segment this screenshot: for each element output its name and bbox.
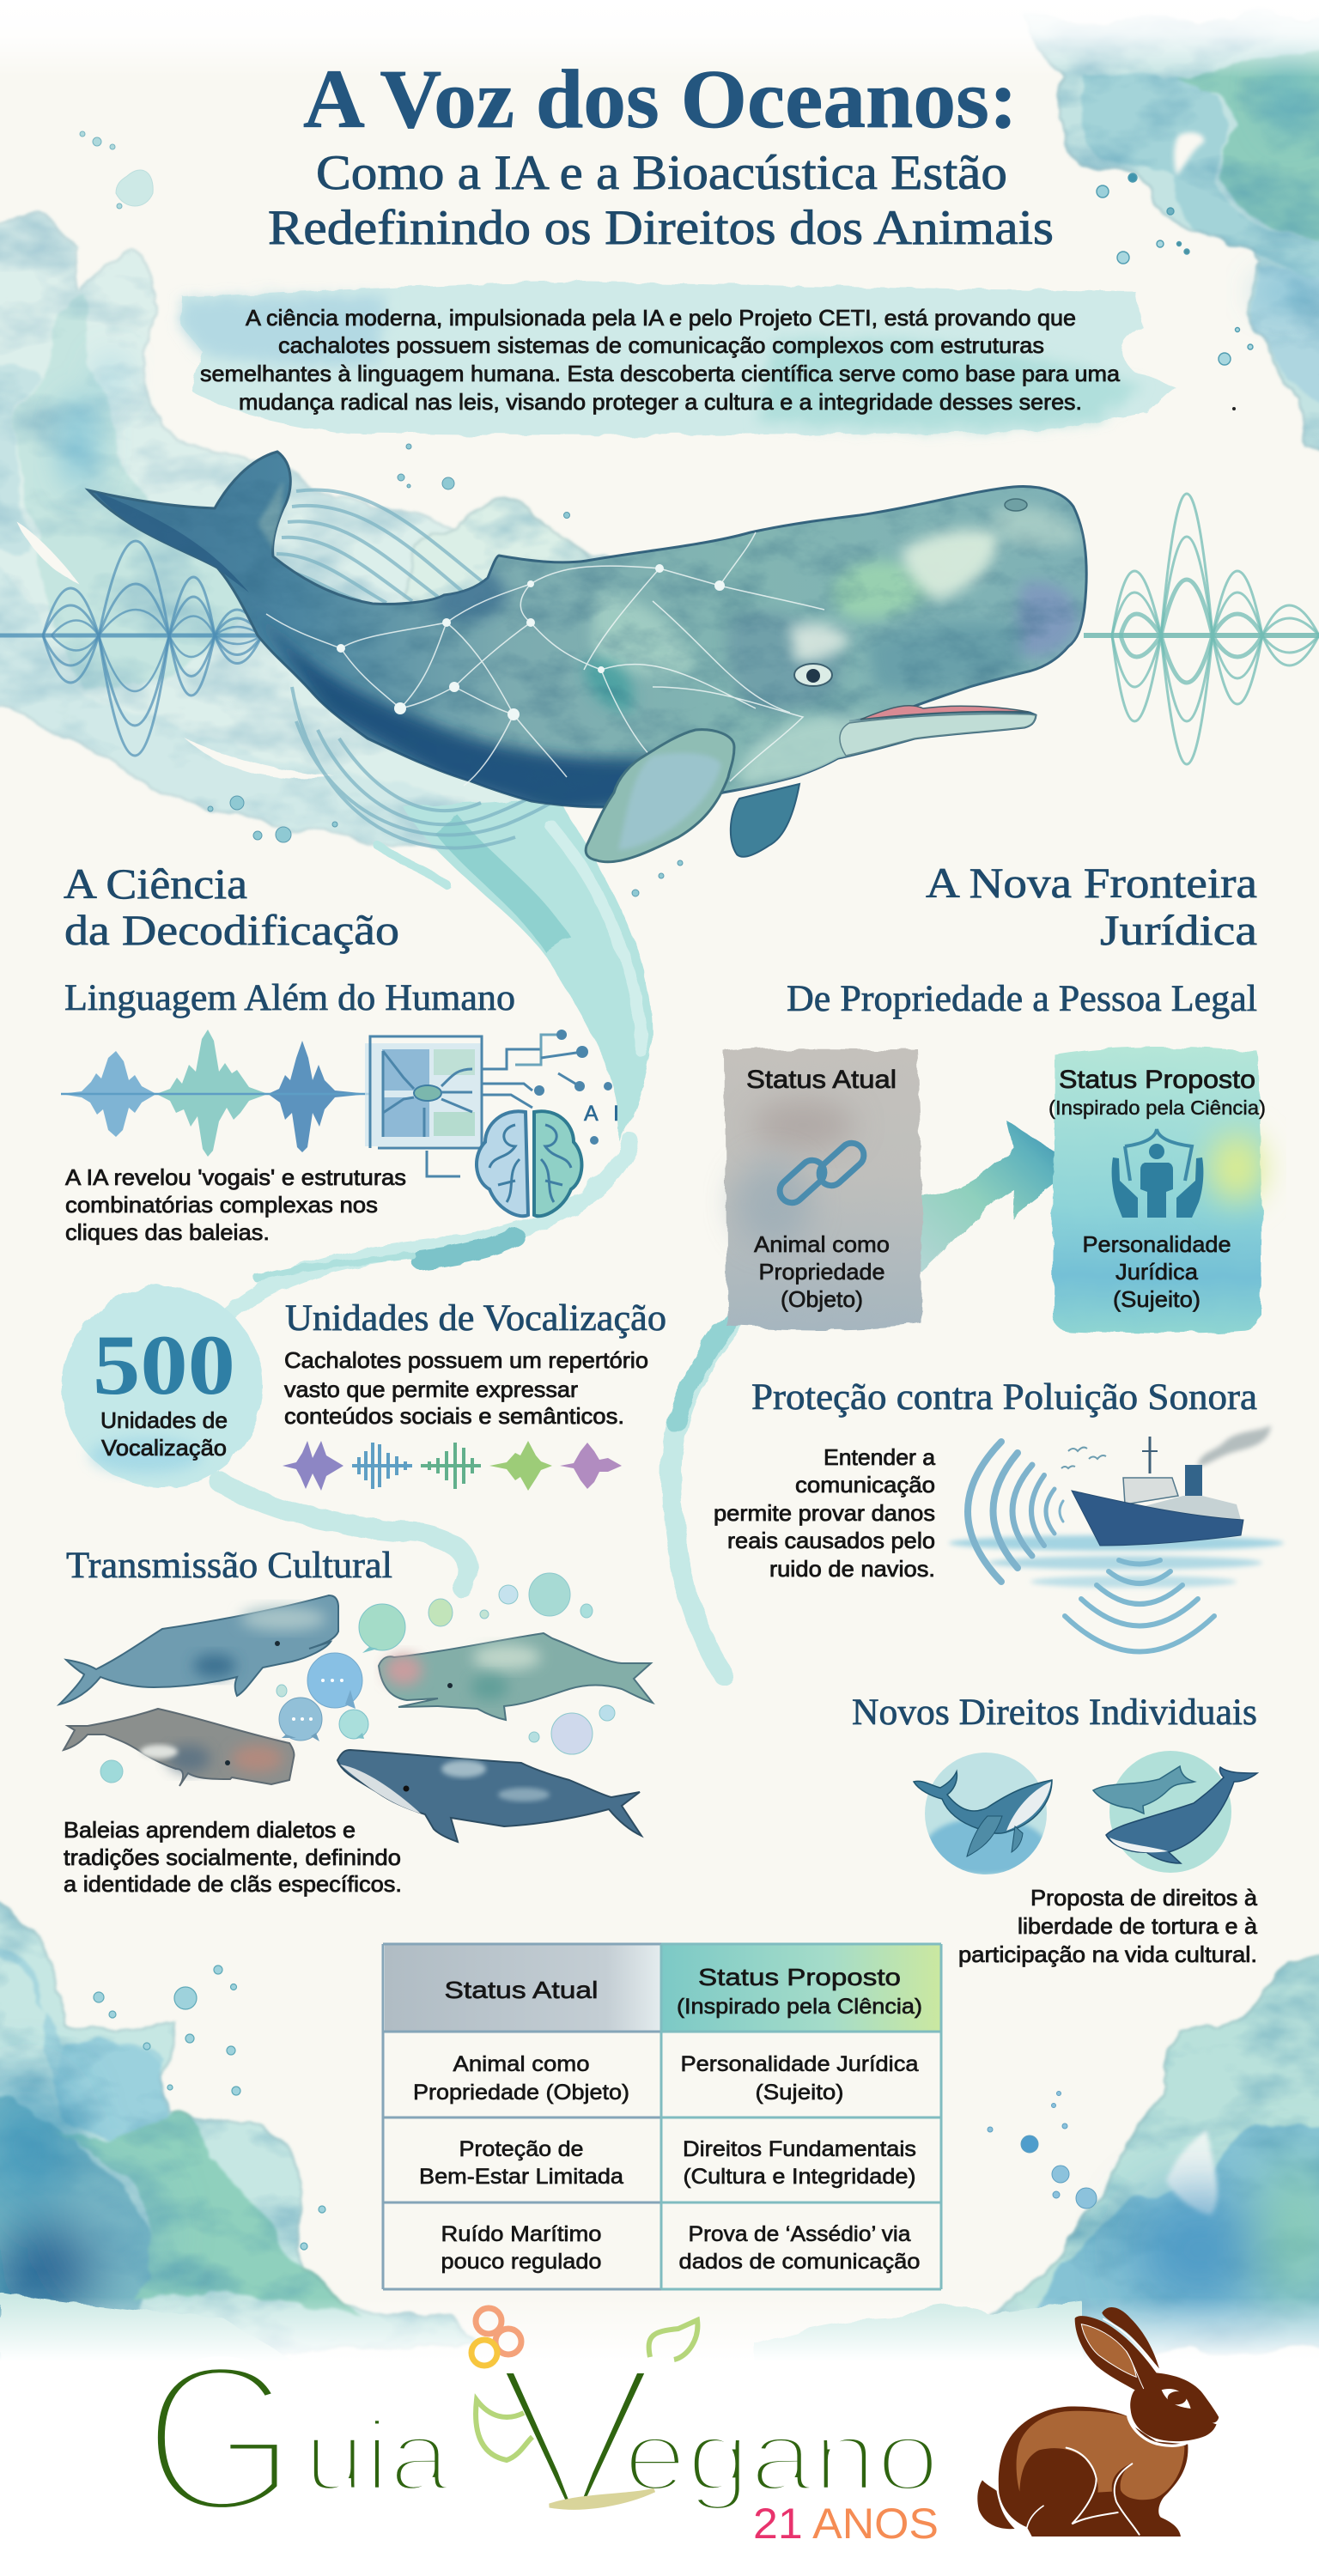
panel: status proposto: Personalidade xyxy=(1082,1231,1231,1257)
small dot xyxy=(1232,407,1236,410)
icon: rabbit xyxy=(977,2307,1219,2537)
blue pigment top right xyxy=(1254,52,1319,309)
comparison table: dados de comunicação xyxy=(678,2250,921,2274)
whale body xyxy=(88,452,1086,807)
section heading: legal: Jurídica xyxy=(1100,906,1257,954)
text: individual rights: participação na vida cultural. xyxy=(958,1941,1257,1967)
eye xyxy=(794,664,832,686)
whale colour washes xyxy=(94,481,1078,816)
stat circle 500 xyxy=(62,1286,263,1487)
splatter droplets bottom right xyxy=(988,2092,1097,2208)
neural network lines xyxy=(266,532,824,786)
subtitle line 2: Redefinindo os Direitos dos Animais xyxy=(268,201,1054,255)
text: cultural transmission: tradições socialmente, definindo xyxy=(64,1844,401,1870)
logo: Guia Vegano xyxy=(142,2308,939,2560)
header left xyxy=(385,1944,661,2032)
comparison table: Animal como xyxy=(453,2052,589,2076)
paper-coloured gaps in the left wash xyxy=(19,524,335,779)
mini waveforms xyxy=(283,1441,622,1491)
intro text: semelhantes à linguagem humana. Esta descoberta científica serve como base para uma xyxy=(200,361,1121,386)
heading: vocal units: Unidades de Vocalização xyxy=(285,1298,666,1339)
text: individual rights: Proposta de direitos à xyxy=(1030,1885,1258,1911)
pigment bottom right xyxy=(1134,2155,1319,2310)
panel: status atual: (Objeto) xyxy=(781,1286,863,1312)
whale 2 xyxy=(379,1633,653,1720)
icon: brain xyxy=(477,1111,581,1216)
label: A I xyxy=(584,1102,619,1126)
whale highlights xyxy=(739,507,1082,786)
watercolor wash: top right xyxy=(1019,17,1319,464)
text: individual rights: liberdade de tortura e à xyxy=(1018,1913,1258,1939)
body patch xyxy=(1017,2411,1184,2500)
main title: A Voz dos Oceanos: xyxy=(303,53,1018,146)
blue accents in the left wash xyxy=(60,354,127,489)
lower jaw xyxy=(840,714,1036,756)
wash behind whale xyxy=(404,502,601,601)
text: noise pollution: permite provar danos xyxy=(714,1500,935,1526)
text: vocal units: vasto que permite expressar xyxy=(284,1376,578,1402)
speech bubbles xyxy=(279,1604,405,1741)
icon: AI chip xyxy=(365,1030,612,1176)
intro text: A ciência moderna, impulsionada pela IA e pelo Projeto CETI, está provando que xyxy=(246,305,1076,331)
wordmark: G xyxy=(142,2318,298,2557)
head and front ear xyxy=(1075,2316,1219,2441)
section heading: legal: A Nova Fronteira xyxy=(926,859,1257,907)
panel: status atual xyxy=(725,1048,922,1329)
white fade bottom xyxy=(0,2297,1319,2361)
label: A I: A xyxy=(584,1102,599,1126)
panel: status proposto: Status Proposto xyxy=(1059,1066,1255,1094)
stat circle 500: Vocalização xyxy=(101,1435,227,1461)
intro band background xyxy=(182,282,1175,435)
white fade top xyxy=(0,0,1319,77)
panel: status proposto: Jurídica xyxy=(1115,1259,1199,1285)
sound arcs xyxy=(968,1442,1063,1582)
rear fin xyxy=(731,784,799,857)
ship xyxy=(1072,1437,1243,1546)
tail xyxy=(977,2480,1015,2529)
logo: Guia Vegano: V xyxy=(494,2320,657,2560)
text: vocal units xyxy=(284,1347,648,1429)
droplets top left xyxy=(80,131,153,209)
title block xyxy=(268,53,1054,255)
swoosh xyxy=(550,2490,654,2507)
comparison table: Ruído Marítimo xyxy=(441,2222,601,2246)
comparison table: Proteção de xyxy=(459,2137,584,2161)
bubbles xyxy=(100,1573,615,1783)
text: cultural transmission: a identidade de clãs específicos. xyxy=(64,1871,402,1897)
arrow: current to proposed xyxy=(910,1121,1078,1279)
comparison table: (Cultura e Integridade) xyxy=(684,2165,915,2189)
flower xyxy=(471,2308,521,2366)
watercolor wash: left column xyxy=(0,216,618,850)
section heading: science xyxy=(64,860,399,954)
main whale xyxy=(88,452,1086,862)
watercolor wash: bottom right xyxy=(962,1945,1319,2353)
anniversary: 21 ANOS xyxy=(753,2500,939,2548)
concentric arcs behind whale xyxy=(273,489,584,848)
heading: noise pollution: Proteção contra Poluição Sonora xyxy=(751,1377,1257,1418)
left medallion xyxy=(914,1753,1052,1874)
text: individual rights xyxy=(958,1885,1258,1967)
blowhole xyxy=(1005,499,1027,511)
comparison table: Status Proposto xyxy=(698,1964,901,1990)
white footer xyxy=(0,2361,1319,2576)
comparison table: (Inspirado pela Clência) xyxy=(677,1995,922,2019)
waveform to AI xyxy=(61,1030,371,1157)
icons: whale medallions xyxy=(914,1751,1257,1874)
intro text: cachalotes possuem sistemas de comunicação complexos com estruturas xyxy=(278,332,1044,358)
grid xyxy=(383,1944,941,2289)
text: noise pollution xyxy=(714,1444,936,1582)
panel: status proposto: (Sujeito) xyxy=(1113,1286,1200,1312)
birds xyxy=(1061,1448,1106,1468)
section heading: science: da Decodificação xyxy=(64,906,399,954)
comparison table: (Sujeito) xyxy=(756,2081,843,2105)
label: A I: I xyxy=(613,1102,619,1126)
droplets around whale xyxy=(208,444,683,896)
text: cultural transmission xyxy=(64,1817,402,1897)
deep blue pigment bottom left xyxy=(0,2078,155,2310)
logo: Guia Vegano: egano xyxy=(623,2400,939,2512)
panel: status proposto: (Inspirado pela Ciência) xyxy=(1049,1097,1266,1119)
text: noise pollution: ruido de navios. xyxy=(769,1556,935,1582)
text: vocal units: Cachalotes possuem um repertório xyxy=(284,1347,648,1373)
text: noise pollution: comunicação xyxy=(795,1472,935,1498)
comparison table: Direitos Fundamentais xyxy=(683,2137,916,2161)
text: AI paragraph: cliques das baleias. xyxy=(65,1219,270,1245)
leaves xyxy=(476,2320,697,2460)
ridge under the table xyxy=(0,2293,1082,2370)
ribbon: whale to circle xyxy=(219,799,740,1674)
text: vocal units: conteúdos sociais e semânticos. xyxy=(284,1403,624,1429)
left sound wave xyxy=(0,541,309,756)
label: Unidades de xyxy=(100,1407,228,1433)
flipper xyxy=(586,730,734,862)
section heading: legal xyxy=(926,859,1257,954)
right sound wave xyxy=(1084,494,1319,764)
heading: language: Linguagem Além do Humano xyxy=(64,978,515,1018)
subtitle line 1: Como a IA e a Bioacústica Estão xyxy=(316,146,1007,200)
illustration: ship and sound xyxy=(949,1425,1284,1652)
whale group xyxy=(59,1573,653,1842)
comparison table: Bem-Estar Limitada xyxy=(419,2165,623,2189)
back ear xyxy=(1102,2307,1159,2368)
network nodes xyxy=(337,564,725,720)
comparison table: Status Atual xyxy=(445,1977,598,2003)
paper gap top right xyxy=(1174,132,1204,176)
intro text: mudança radical nas leis, visando proteger a cultura e a integridade desses seres. xyxy=(239,389,1082,415)
panel: status atual: Status Atual xyxy=(746,1066,897,1094)
icon: protected person xyxy=(1112,1129,1203,1218)
header right xyxy=(661,1944,941,2032)
watercolor wash: bottom left xyxy=(0,1886,481,2387)
body base xyxy=(999,2406,1188,2537)
text: cultural transmission: Baleias aprendem dialetos e xyxy=(64,1817,356,1843)
whale mottling xyxy=(88,452,1086,807)
right medallion xyxy=(1093,1751,1257,1873)
water xyxy=(949,1535,1284,1588)
white contour lines xyxy=(998,2319,1185,2535)
panel: status atual: Animal como xyxy=(754,1231,890,1257)
droplets top right xyxy=(1097,173,1253,365)
heading: individual rights: Novos Direitos Individuais xyxy=(852,1692,1257,1733)
text: AI paragraph: A IA revelou 'vogais' e estruturas xyxy=(65,1164,406,1190)
eye xyxy=(1162,2389,1191,2409)
whale 3 xyxy=(64,1709,294,1786)
number: 500 xyxy=(93,1317,235,1413)
paper gap bottom right xyxy=(1166,2129,1218,2215)
text: AI paragraph: combinatórias complexas nos xyxy=(65,1192,378,1218)
icon: chain link xyxy=(775,1139,869,1207)
mouth interior xyxy=(860,706,1029,720)
panel: status atual: Propriedade xyxy=(759,1259,884,1285)
whale 1 xyxy=(59,1595,338,1704)
heading: cultural transmission: Transmissão Cultural xyxy=(66,1546,392,1586)
circle blob xyxy=(62,1286,263,1487)
heading: property to person: De Propriedade a Pessoa Legal xyxy=(787,979,1257,1019)
inner ear xyxy=(1081,2324,1136,2377)
comparison table: Personalidade Jurídica xyxy=(680,2052,919,2076)
comparison table: pouco regulado xyxy=(441,2250,601,2274)
smoke xyxy=(1198,1425,1271,1467)
text: noise pollution: Entender a xyxy=(824,1444,936,1470)
logo: Guia Vegano: uia xyxy=(304,2400,451,2512)
whale 4 xyxy=(337,1750,641,1842)
comparison table: Prova de ‘Assédio’ via xyxy=(689,2222,911,2246)
comparison table: Propriedade (Objeto) xyxy=(413,2081,629,2105)
splatter droplets bottom left xyxy=(94,1965,325,2250)
comparison table xyxy=(383,1944,941,2289)
section heading: science: A Ciência xyxy=(64,860,247,908)
text: AI paragraph xyxy=(65,1164,406,1245)
intro text xyxy=(200,305,1121,415)
text: noise pollution: reais causados pelo xyxy=(727,1528,935,1553)
panel: status proposto xyxy=(1049,1047,1266,1334)
